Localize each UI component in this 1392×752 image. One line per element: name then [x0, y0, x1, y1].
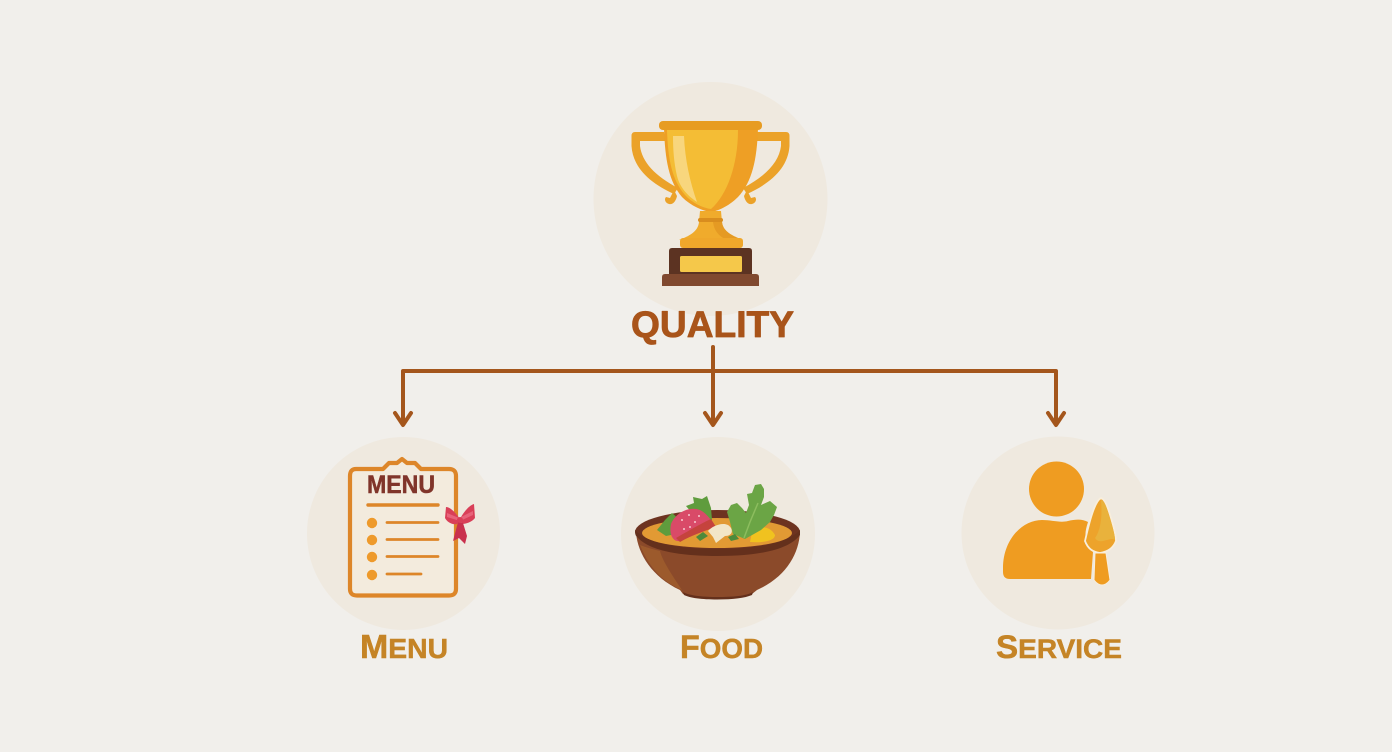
panel: quality: [594, 82, 828, 345]
icon: menu clipboard: [350, 459, 475, 596]
parsley: [727, 484, 777, 539]
label: food: FOOD: [680, 629, 763, 665]
label: menu: MENU: [360, 628, 448, 665]
icon: bowl of food: [635, 484, 800, 600]
icon: trowel: [1085, 498, 1116, 585]
bowl back rim: [635, 510, 800, 554]
panel: food: [621, 437, 815, 665]
mushroom: [708, 524, 732, 543]
greens: [686, 496, 712, 520]
yellow pepper: [750, 527, 775, 542]
panel: service: [962, 436, 1154, 665]
icon: red bow: [445, 504, 475, 544]
panel: menu: [307, 437, 500, 665]
icon: trophy: [632, 121, 790, 286]
heading: quality: QUALITY: [631, 304, 794, 345]
connector arrows: [395, 347, 1064, 425]
icon: menu clipboard: MENU: [367, 471, 435, 499]
label: service: SERVICE: [996, 629, 1122, 665]
icon: person with trowel: [1003, 462, 1116, 585]
bowl body: [636, 532, 800, 599]
strawberry: [670, 509, 716, 541]
